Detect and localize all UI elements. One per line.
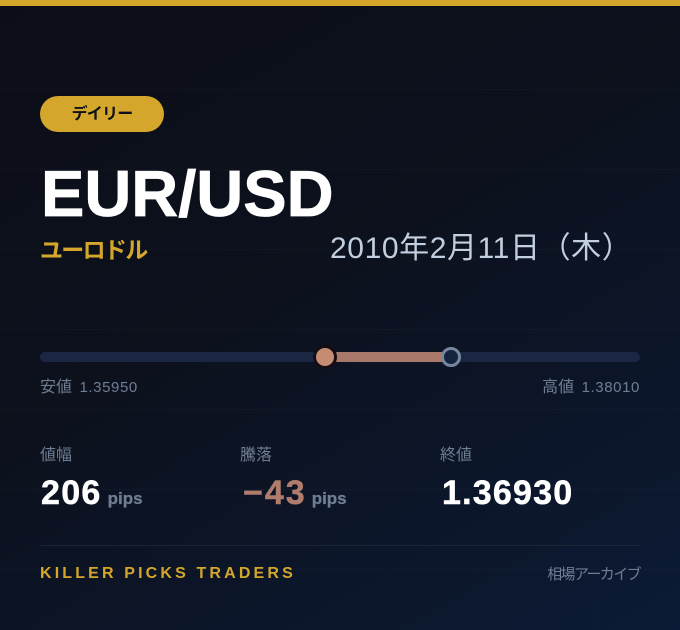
stat label: 値幅 [40,447,72,464]
high label: 高値 1.38010 [542,379,640,396]
stat value: 206 pips [41,474,143,512]
stat value: 1.36930 [442,474,573,512]
stat label: 騰落 [240,447,272,464]
range slider [40,345,640,369]
badge: daily [40,96,164,132]
stat label: 終値 [440,447,472,464]
title: currency pair: EUR/USD [41,157,334,230]
open marker [313,345,337,369]
stat: range [40,446,143,512]
stat: close [440,446,573,512]
date: 2010年2月11日（木） [330,232,632,265]
close marker [441,347,461,367]
top accent bar [0,0,680,6]
stat value: −43 pips [243,474,347,512]
footer brand: KILLER PICKS TRADERS [40,565,296,582]
slider track [40,352,640,362]
slider range fill [325,352,451,362]
stat: change [240,446,347,512]
low label: 安値 1.35950 [40,379,138,396]
footer divider [40,545,640,546]
badge: daily: デイリー [72,106,132,123]
subtitle: euro dollar: ユーロドル [40,237,147,263]
footer archive label: 相場アーカイブ [547,566,640,583]
